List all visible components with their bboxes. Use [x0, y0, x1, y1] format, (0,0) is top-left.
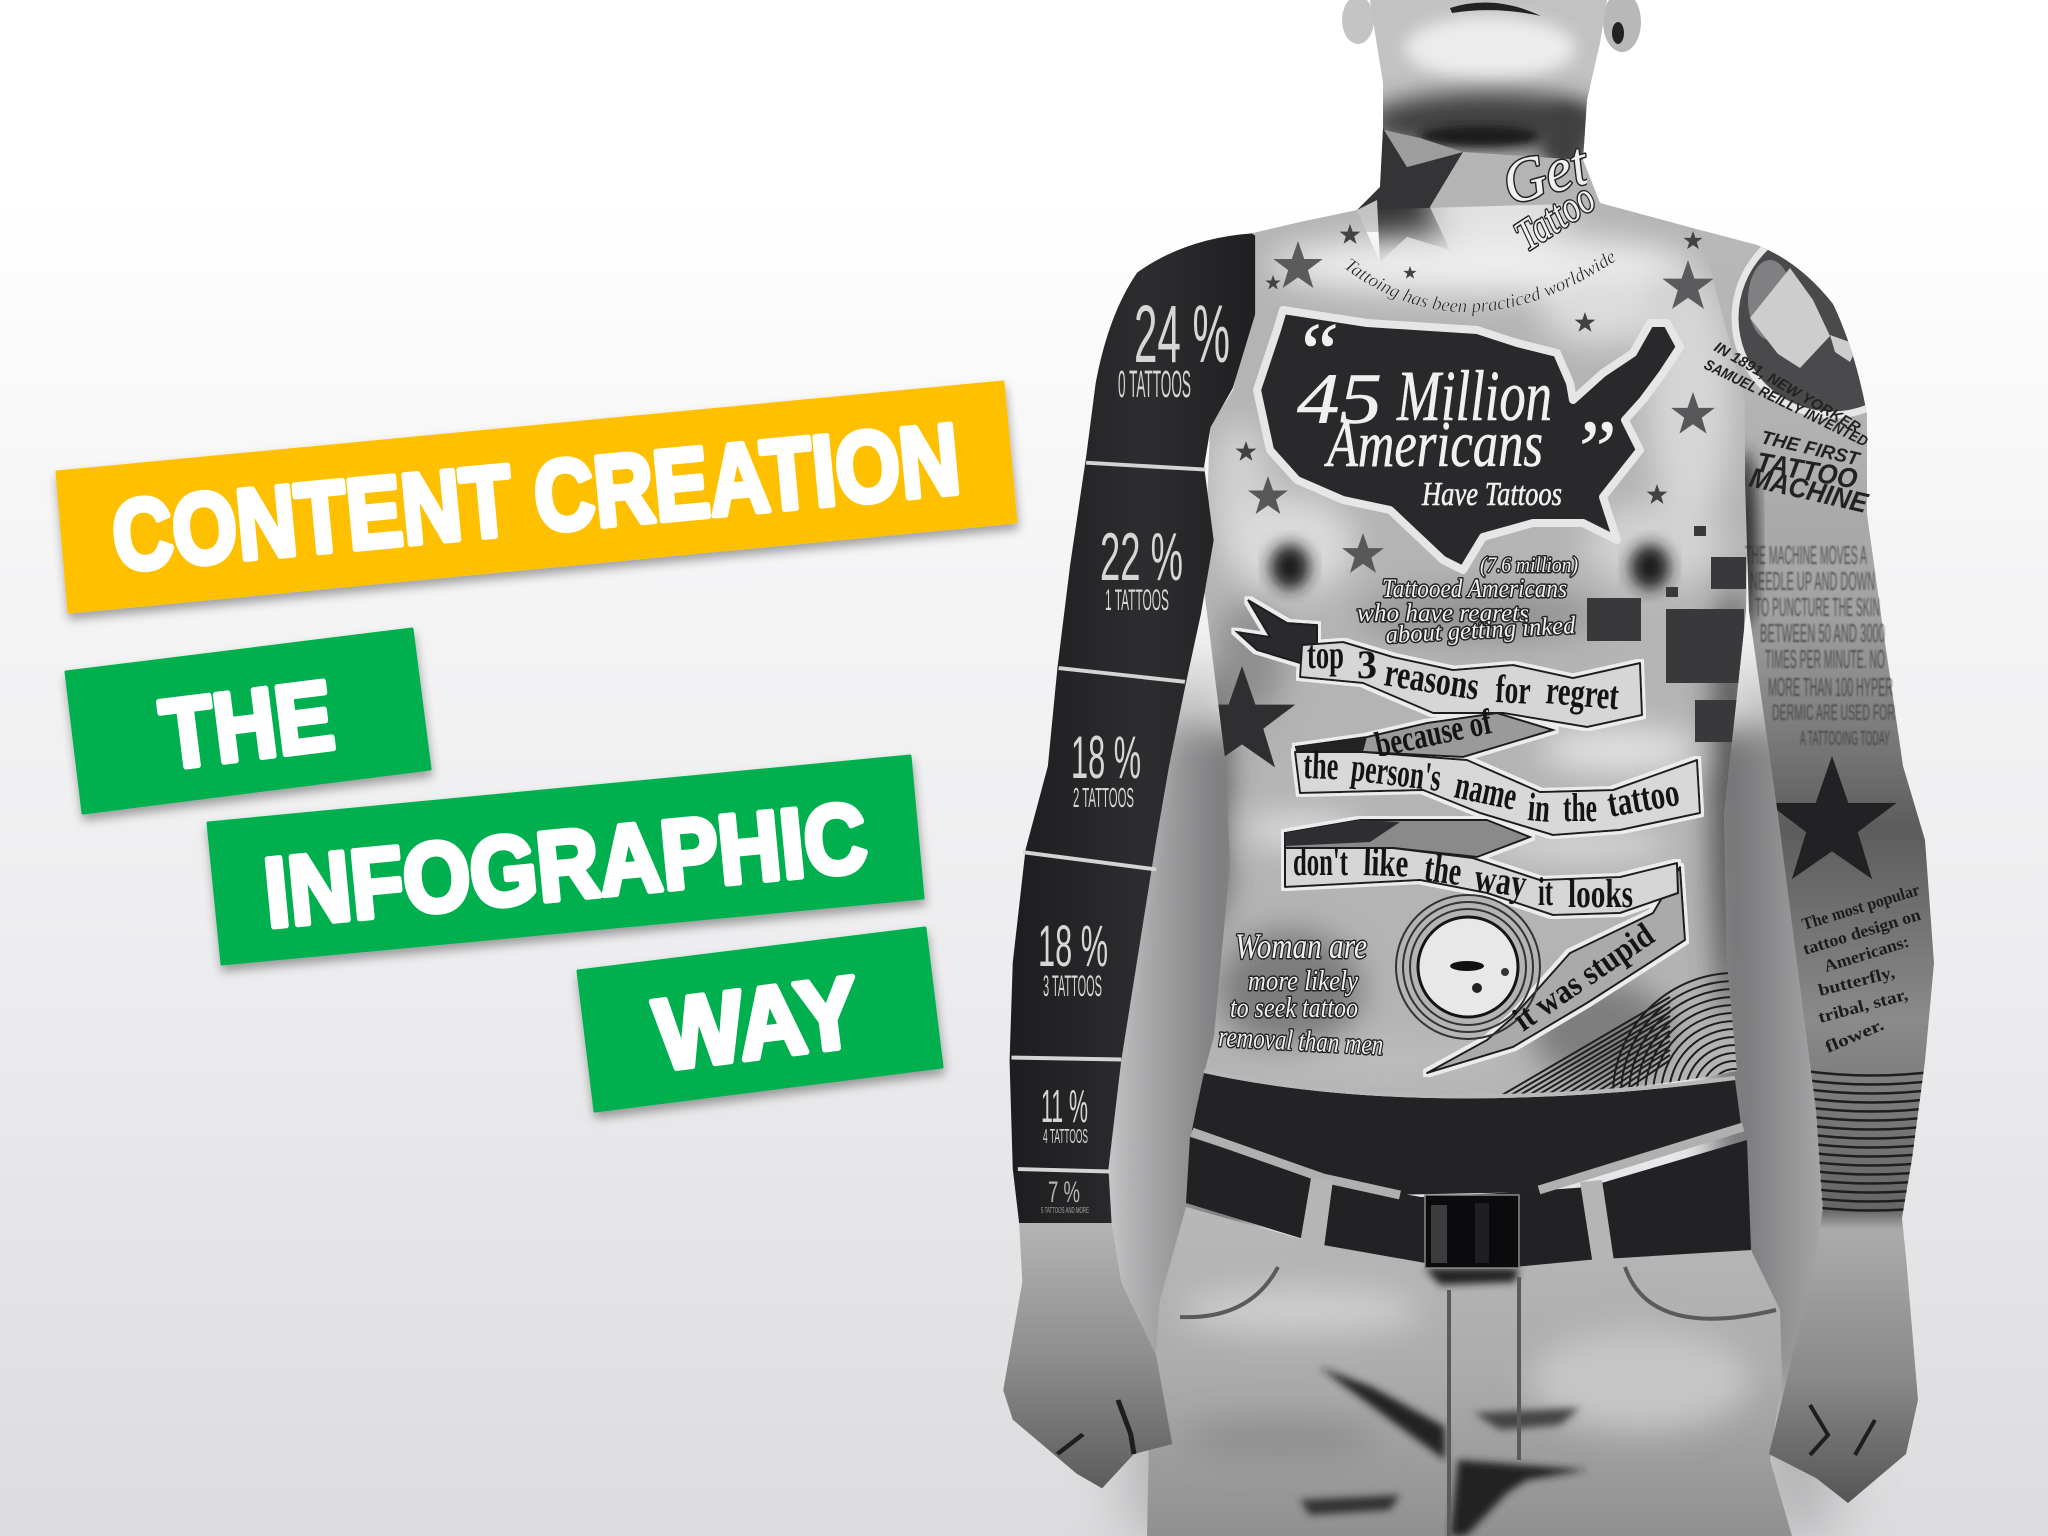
stat: 24 percent: 24 % — [1134, 289, 1230, 380]
popular designs text: tribal, star, — [1816, 985, 1910, 1027]
face shading — [1383, 10, 1590, 168]
women removal text — [1218, 926, 1384, 1062]
collar text: practiced worldwide: Tattoing has been practiced worldwide — [1344, 253, 1616, 316]
tattoo machine text: IN 1891, NEW YORKER — [1711, 339, 1863, 437]
stat: 18 percent two tattoos: 18 % — [1071, 724, 1141, 791]
figure: tattooed man — [1003, 0, 1940, 1536]
popular designs text: tattoo design on — [1801, 905, 1923, 959]
jeans folds — [1300, 1268, 1588, 1536]
ribbon text: person's name: the — [1303, 742, 1339, 788]
ribbon text: top 3 reasons: for — [1495, 666, 1532, 713]
ribbon fold dark strip — [1285, 820, 1400, 846]
map headline — [1293, 306, 1617, 513]
wave fan tattoo — [1613, 973, 1857, 1217]
armpit shading — [1733, 450, 1757, 630]
ear right with gauge — [1603, 0, 1641, 52]
popular designs text: butterfly, — [1816, 963, 1897, 1000]
sleeve divider lines — [1011, 463, 1205, 1172]
women removal text: Woman are — [1235, 926, 1367, 966]
map headline: Million — [1396, 356, 1552, 436]
dark square tattoos — [1587, 526, 1746, 742]
ribbon text: don't like: it — [1538, 869, 1553, 914]
sleeve statistics: 11 % — [1041, 1080, 1088, 1132]
text: NEEDLE UP AND DOWN — [1750, 566, 1875, 596]
neck quote mark — [1480, 158, 1496, 182]
belt buckle — [1425, 1195, 1519, 1268]
sleeve statistics — [1038, 289, 1230, 1215]
banner: Content Creation: CONTENT CREATION — [108, 403, 964, 593]
ribbon: don't like — [1285, 848, 1678, 915]
large arm star — [1767, 756, 1897, 879]
head and neck — [1300, 0, 1700, 232]
stat: 18 percent two tattoos — [1071, 724, 1141, 813]
ribbon text: person's name — [1303, 742, 1682, 831]
stat: 24 percent — [1118, 289, 1230, 406]
map headline: Have Tattoos — [1421, 476, 1562, 513]
map headline: “ — [1293, 306, 1340, 399]
map headline: ” — [1570, 404, 1617, 497]
navel rings — [1396, 895, 1540, 1039]
neck star tattoo — [1357, 128, 1463, 262]
text: DERMIC ARE USED FOR — [1772, 700, 1895, 725]
popular designs text — [1800, 880, 1923, 1057]
popular designs text: flower. — [1822, 1015, 1887, 1057]
stat: 7 percent: 5 TATTOOS AND MORE — [1041, 1206, 1089, 1215]
ribbon tail — [1237, 600, 1317, 663]
women removal text: removal than men — [1218, 1021, 1384, 1062]
shoulder circle tattoo — [1735, 221, 1929, 415]
text: THE MACHINE MOVES A — [1745, 540, 1867, 570]
regret statistic: Tattooed Americans — [1382, 574, 1567, 603]
tattoo machine text: THE FIRST — [1759, 427, 1862, 471]
ribbon: top 3 reasons — [1300, 642, 1642, 727]
ribbon text: don't like: like — [1363, 839, 1409, 886]
neck text: Tattoo — [1506, 173, 1604, 260]
women removal text: more likely — [1248, 965, 1358, 997]
regret statistic: (7.6 million) — [1480, 552, 1578, 577]
sleeve statistics: 4 TATTOOS — [1043, 1126, 1088, 1148]
regret statistic: about getting inked — [1385, 612, 1577, 649]
ribbon text: don't like: don't — [1293, 839, 1348, 884]
women removal text: to seek tattoo — [1230, 992, 1358, 1024]
text: A TATTOOING TODAY — [1800, 728, 1890, 750]
stat: 22 percent — [1100, 519, 1183, 617]
jeans seams and pockets — [1180, 1267, 1776, 1536]
navel — [1418, 917, 1518, 1017]
tattoo machine text: SAMUEL REILLY INVENTED — [1701, 356, 1871, 451]
stat: 18 percent three tattoos: 18 % — [1038, 914, 1108, 979]
gap shadows between arms and torso — [1100, 730, 1850, 1450]
banner: Way: WAY — [649, 955, 865, 1092]
ribbon text: person's name: person's — [1349, 744, 1444, 800]
map headline: 45 — [1297, 359, 1382, 439]
ribbon text: it was stupid: it was stupid — [1507, 916, 1661, 1039]
ribbon fold dark end — [1295, 738, 1367, 751]
stat: 24 percent: 0 TATTOOS — [1118, 364, 1191, 406]
ribbon text: don't like: the — [1422, 844, 1465, 894]
ribbon text: top 3 reasons: top — [1307, 632, 1344, 677]
belt — [1186, 1137, 1751, 1267]
stat: 18 percent three tattoos — [1038, 914, 1108, 1003]
ribbon: it was stupid — [1427, 867, 1685, 1073]
ribbon fold: because of — [1295, 713, 1553, 757]
stat: 22 percent: 22 % — [1100, 519, 1183, 595]
ribbon text: because of: because of — [1371, 701, 1496, 765]
ear left — [1342, 0, 1374, 44]
ribbon text: don't like: looks — [1568, 871, 1633, 916]
banner: Way — [578, 928, 942, 1111]
right arm — [1700, 230, 1934, 1503]
ribbon: person's name — [1295, 752, 1700, 835]
map headline: Americans — [1324, 408, 1543, 481]
banner: Infographic: INFOGRAPHIC — [260, 782, 871, 948]
regret statistic: who have regrets — [1357, 600, 1529, 627]
banner: The: THE — [155, 659, 339, 790]
nipples — [1270, 544, 1310, 590]
jeans — [1147, 1207, 1792, 1536]
sleeve statistics: 2 TATTOOS — [1073, 782, 1134, 813]
popular designs text: The most popular — [1800, 880, 1922, 934]
waistband underwear — [1192, 1073, 1741, 1195]
hatch tattoo — [1497, 997, 1670, 1098]
tattoo machine text: MACHINE — [1747, 462, 1872, 519]
lips — [1450, 3, 1541, 16]
ribbon fold: don't like — [1285, 820, 1530, 857]
ribbon text: top 3 reasons: 3 — [1357, 642, 1377, 687]
banner: The — [66, 629, 430, 813]
tattoo machine text — [1701, 339, 1872, 519]
ribbon text: person's name: the — [1563, 785, 1597, 830]
ribbon text: don't like — [1293, 839, 1633, 916]
ribbon text: person's name: tattoo — [1604, 769, 1682, 826]
left hand — [1003, 1223, 1172, 1488]
jeans waist edge — [1192, 1127, 1743, 1195]
stat: 7 percent — [1041, 1176, 1089, 1215]
cast shadow behind figure — [1130, 660, 1835, 1536]
forearm stripes — [1805, 1071, 1940, 1210]
torso — [1204, 152, 1757, 1096]
popular designs text: Americans: — [1822, 932, 1911, 976]
neck text: Get a — [1495, 117, 1638, 219]
torso cloud shading — [1208, 204, 1746, 1094]
sleeve statistics: 1 TATTOOS — [1105, 584, 1169, 617]
ribbon text: top 3 reasons: regret — [1544, 667, 1621, 718]
chest stars — [1189, 224, 1715, 767]
sleeve statistics: 3 TATTOOS — [1043, 970, 1102, 1003]
ribbon text: top 3 reasons: reasons — [1382, 649, 1482, 709]
belt loops — [1296, 1178, 1615, 1272]
ribbon text: person's name: name — [1451, 762, 1521, 819]
tattoo machine text: TATTOO — [1754, 446, 1860, 495]
ribbons — [1237, 600, 1700, 1073]
regret statistic — [1357, 552, 1578, 649]
ribbon text: top 3 reasons — [1307, 632, 1621, 718]
ribbon text: person's name: in — [1526, 784, 1552, 831]
ribbon text: don't like: way — [1472, 854, 1530, 906]
jeans soft highlights — [1180, 1286, 1750, 1460]
left hand creases — [1057, 1400, 1134, 1454]
left arm black sleeve — [1003, 233, 1255, 1488]
stat: 11 percent — [1041, 1080, 1088, 1148]
machine description text — [1745, 540, 1895, 750]
stat: 7 percent: 7 % — [1048, 1176, 1080, 1209]
right hand creases — [1810, 1405, 1875, 1455]
text: BETWEEN 50 AND 3000 — [1760, 618, 1885, 648]
USA map tattoo — [1257, 310, 1680, 570]
right arm details — [1733, 221, 1940, 1210]
waist highlight — [1204, 1071, 1735, 1096]
